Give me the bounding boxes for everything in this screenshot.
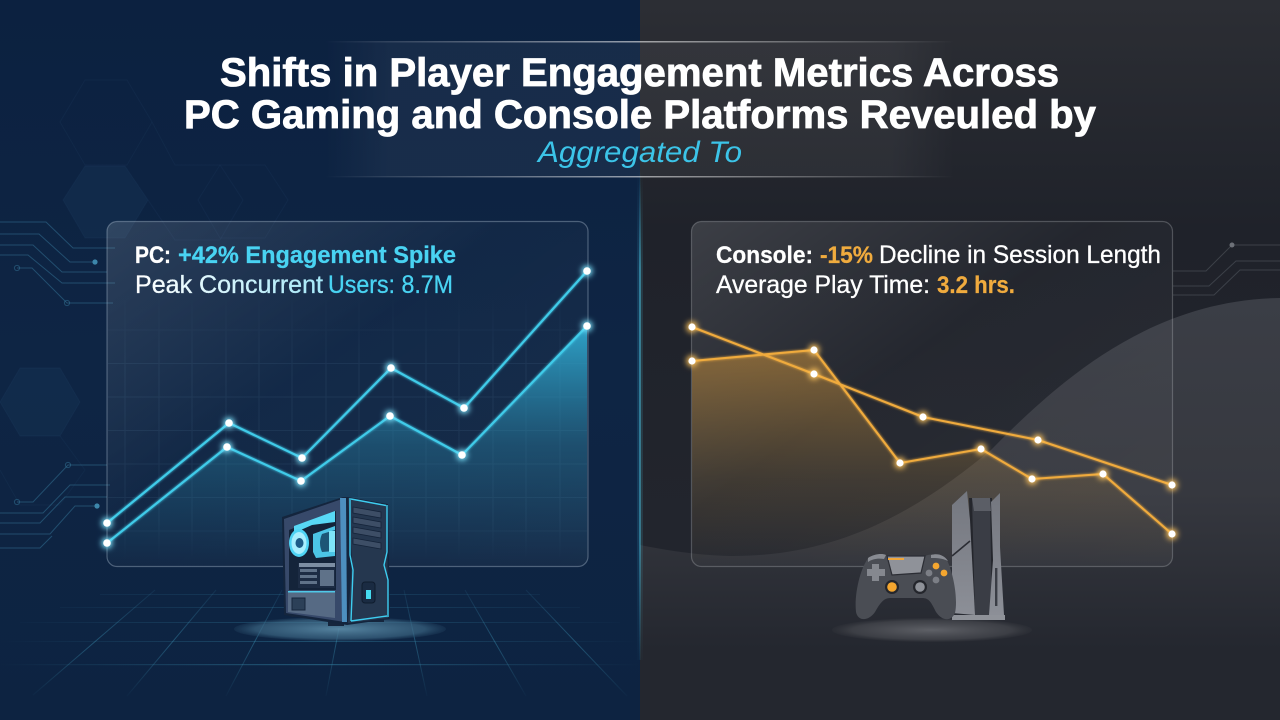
circuit traces: left bottom: [0, 462, 110, 548]
console heading text: Console:: [716, 242, 813, 269]
console heading text: [716, 241, 1161, 299]
background: console side: [640, 0, 1280, 720]
line chart: console: [686, 322, 1178, 565]
hexagon pattern: [0, 80, 288, 505]
title: Shifts in Player Engagement Metrics Across: [220, 51, 1059, 95]
perspective floor grid: [0, 590, 640, 696]
panel: console: [692, 222, 1172, 566]
console heading text: 3.2 hrs.: [937, 272, 1015, 299]
console heading text: Decline in Session Length: [879, 241, 1161, 269]
console heading text: -15%: [820, 242, 873, 269]
title band: [325, 41, 955, 178]
title: [184, 51, 1097, 137]
circuit traces: right: [1173, 242, 1280, 295]
platform: PC: [234, 617, 446, 641]
panel grid: [108, 300, 587, 560]
platform: console: [832, 618, 1032, 642]
icon: game controller: [856, 554, 956, 619]
circuit traces: left top: [0, 222, 115, 306]
title: PC Gaming and Console Platforms Reveuled by: [184, 93, 1097, 137]
console heading text: Average Play Time:: [716, 271, 930, 299]
icon: PC tower: [282, 497, 390, 626]
subtitle: Aggregated To: [536, 136, 742, 169]
panel: PC: [107, 222, 588, 566]
PC heading text: +42% Engagement Spike: [178, 242, 456, 269]
PC heading text: Users: 8.7M: [328, 271, 453, 299]
PC heading text: [135, 242, 456, 299]
PC heading text: Peak Concurrent: [135, 271, 323, 299]
icon: game console: [952, 491, 1005, 620]
line chart: PC: [102, 266, 592, 565]
divider: [637, 170, 643, 660]
PC heading text: PC:: [135, 242, 171, 269]
background: PC side: [0, 0, 640, 720]
